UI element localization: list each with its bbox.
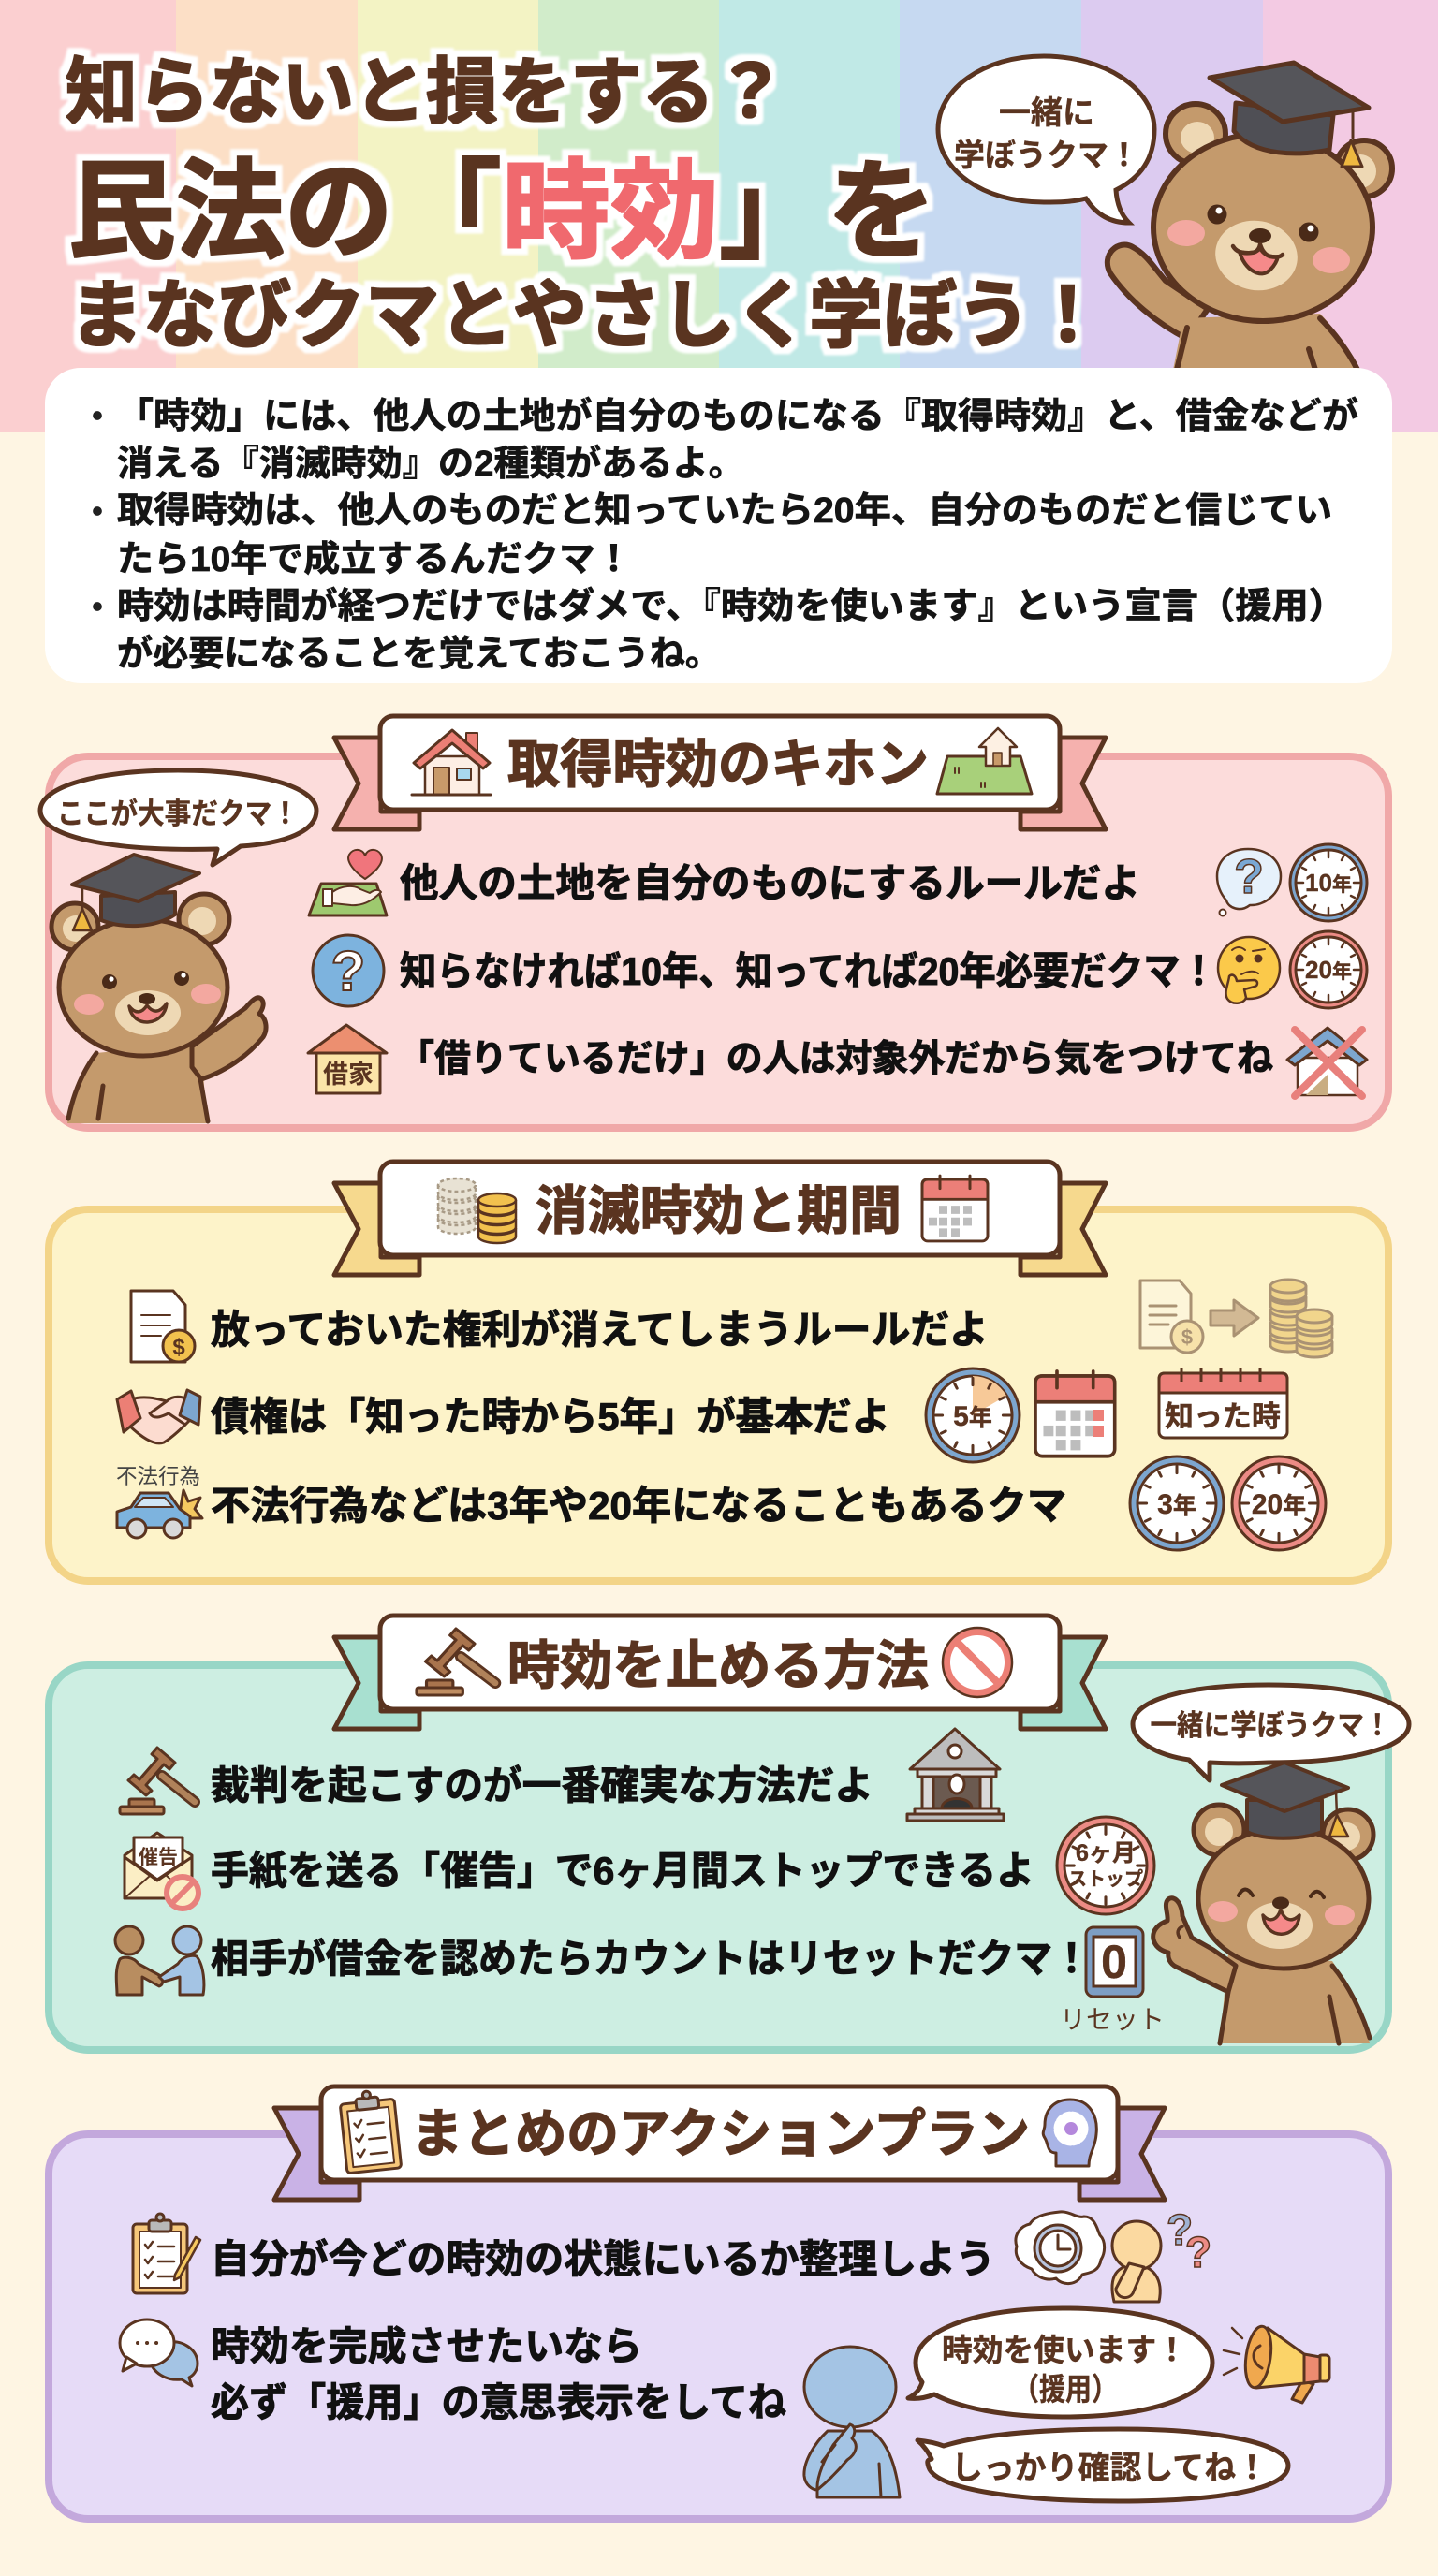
icon: clock six months: 6ヶ月 <box>1076 1840 1136 1866</box>
icon: gavel <box>120 1748 195 1814</box>
icon: question marks: ? <box>1185 2228 1211 2276</box>
row: land rule <box>309 844 1367 921</box>
icon: hand and heart <box>309 850 387 915</box>
icon: clock 5 years: 5年 <box>953 1401 992 1432</box>
icon: chat bubbles <box>120 2320 198 2386</box>
icon: megaphone <box>1224 2325 1329 2403</box>
title: まなびクマとやさしく学ぼう！ <box>69 273 1105 357</box>
panel: extinctive prescription <box>49 1162 1388 1581</box>
icon: land with house <box>937 728 1032 794</box>
icon: clock 10 years: 10年 <box>1305 869 1352 897</box>
icon: question marks: ? <box>1167 2205 1193 2254</box>
icon: thinking person <box>1112 2221 1161 2302</box>
icon: no sign <box>943 1628 1012 1697</box>
row: demand letter: 手紙を送る「催告」で6ヶ月間ストップできるよ <box>211 1849 1034 1893</box>
icon: clock thought cloud <box>1016 2212 1105 2284</box>
speech bubble: study together: 一緒に学ぼうクマ！ <box>1150 1709 1391 1742</box>
row: organize status <box>133 2205 1211 2302</box>
icon: envelope: 催告 <box>139 1847 178 1868</box>
speech bubble: study together <box>1133 1685 1409 1780</box>
ribbon heading <box>334 716 1106 829</box>
icon: clock six months: ストップ <box>1068 1868 1143 1890</box>
title: 知らないと損をする？ <box>66 52 786 133</box>
icon: person with speech <box>804 2347 900 2497</box>
icon: clipboard with pencil <box>133 2214 200 2293</box>
row: demand letter <box>125 1817 1154 1914</box>
icon: clipboard <box>339 2088 402 2174</box>
icon: clock 3 years: 3年 <box>1157 1489 1196 1520</box>
icon: zero counter: 0 <box>1101 1936 1127 1988</box>
icon: clock 10 years <box>1290 844 1367 921</box>
row: three or twenty years: 不法行為などは3年や20年になることもあるクマ <box>211 1484 1066 1528</box>
icon: rental house <box>308 1025 387 1093</box>
row: renters excluded: 「借りているだけ」の人は対象外だから気をつけてね <box>398 1039 1273 1079</box>
speech bubble: invoke <box>908 2308 1212 2417</box>
ribbon heading <box>274 2086 1165 2200</box>
icon: calendar with marks <box>1035 1371 1115 1456</box>
row: five years <box>117 1368 1287 1462</box>
icon: gavel <box>417 1629 495 1695</box>
icon: clock 3 years <box>1130 1456 1224 1550</box>
speech bubble: together: 一緒に <box>999 95 1094 131</box>
icon: courthouse <box>907 1729 1004 1821</box>
row: lawsuit: 裁判を起こすのが一番確実な方法だよ <box>211 1764 873 1808</box>
mascot: happy bear <box>1153 1763 1373 2043</box>
speech bubble: important: ここが大事だクマ！ <box>57 798 299 830</box>
ribbon heading: 取得時効のキホン <box>507 735 929 794</box>
icon: house <box>412 730 491 795</box>
speech bubble: invoke: 時効を使います！ <box>942 2333 1187 2367</box>
icon: zero counter <box>1086 1927 1143 1997</box>
row: lawsuit <box>120 1729 1004 1821</box>
icon: head with gear <box>1043 2100 1096 2166</box>
panel: acquisitive prescription <box>40 716 1388 1128</box>
panel: action plan <box>49 2086 1388 2519</box>
icon: clock 20 years: 20年 <box>1252 1489 1306 1520</box>
row: ten or twenty years: 知らなければ10年、知ってれば20年必要だクマ！ <box>400 949 1217 993</box>
row: organize status: 自分が今どの時効の状態にいるか整理しよう <box>211 2237 995 2281</box>
icon: car accident: 不法行為 <box>116 1465 200 1488</box>
icon: question marks <box>1167 2205 1211 2276</box>
icon: calendar label: 知った時 <box>1165 1400 1281 1433</box>
bullet list: が必要になることを覚えておこうね。 <box>117 635 721 674</box>
label: reset: リセット <box>1060 2005 1165 2034</box>
bullet list: 消える『消滅時効』の2種類があるよ。 <box>117 445 744 484</box>
icon: clock 20 years <box>1290 931 1367 1008</box>
icon: clock 5 years <box>926 1368 1020 1462</box>
row: ten or twenty years <box>313 931 1367 1008</box>
bullet list: 「時効」には、他人の土地が自分のものになる『取得時効』と、借金などが <box>117 397 1358 436</box>
icon: clock 20 years <box>1232 1456 1326 1550</box>
title <box>66 52 1105 357</box>
icon: two people shaking hands <box>115 1926 204 1995</box>
speech bubble: together: 学ぼうクマ！ <box>954 138 1139 172</box>
row: five years: 債権は「知った時から5年」が基本だよ <box>211 1395 890 1439</box>
icon: thinking face <box>1218 937 1280 1003</box>
row: acknowledgement resets: 相手が借金を認めたらカウントはリセットだクマ！ <box>211 1937 1091 1981</box>
icon: clock six months <box>1057 1817 1154 1914</box>
icon: question thought bubble: ? <box>1234 850 1264 904</box>
bullet list: 取得時効は、他人のものだと知っていたら20年、自分のものだと信じてい <box>117 491 1332 531</box>
row: rights disappear <box>131 1280 1332 1362</box>
icon: car accident <box>116 1465 202 1538</box>
row: invoke <box>120 2308 1329 2501</box>
title: 民法の「時効」を <box>67 151 936 272</box>
icon: calendar label <box>1159 1368 1287 1438</box>
row: renters excluded <box>308 1025 1367 1096</box>
speech bubble: confirm <box>917 2429 1288 2501</box>
icon: document to coins <box>1140 1280 1332 1357</box>
mascot: pointing bear <box>51 855 266 1123</box>
ribbon heading <box>334 1616 1106 1729</box>
ribbon heading: 消滅時効と期間 <box>536 1181 902 1240</box>
icon: document to coins: $ <box>1181 1325 1193 1349</box>
row: land rule: 他人の土地を自分のものにするルールだよ <box>400 861 1140 905</box>
row: invoke: 時効を完成させたいなら <box>211 2324 642 2368</box>
icon: crossed-out house <box>1287 1028 1367 1096</box>
bullet list <box>94 397 1358 674</box>
icon: rental house: 借家 <box>323 1061 374 1089</box>
icon: document with coin <box>131 1291 195 1362</box>
summary panel <box>45 368 1392 683</box>
speech bubble: invoke: （援用） <box>1013 2372 1118 2407</box>
panel: how to stop prescription <box>49 1616 1409 2050</box>
speech bubble: together <box>938 56 1154 223</box>
row: three or twenty years <box>116 1456 1326 1550</box>
row: acknowledgement resets <box>115 1926 1165 2034</box>
icon: calendar <box>922 1176 988 1241</box>
ribbon heading <box>334 1162 1106 1275</box>
speech bubble: confirm: しっかり確認してね！ <box>951 2451 1268 2486</box>
bullet list: 時効は時間が経つだけではダメで、『時効を使います』という宣言（援用） <box>117 587 1345 626</box>
icon: envelope <box>125 1833 198 1909</box>
icon: clock 20 years: 20年 <box>1305 956 1352 984</box>
row: invoke: 必ず「援用」の意思表示をしてね <box>211 2380 786 2424</box>
icon: question circle <box>313 935 384 1006</box>
bullet list: たら10年で成立するんだクマ！ <box>117 540 632 579</box>
mascot: waving bear <box>1108 63 1392 374</box>
icon: question circle: ? <box>331 940 365 1003</box>
icon: coins <box>438 1178 516 1243</box>
icon: document with coin: $ <box>172 1335 185 1360</box>
ribbon heading: 時効を止める方法 <box>507 1636 929 1695</box>
row: rights disappear: 放っておいた権利が消えてしまうルールだよ <box>211 1308 989 1352</box>
speech bubble: important <box>40 770 316 865</box>
icon: handshake <box>117 1390 200 1443</box>
icon: question thought bubble <box>1217 849 1281 915</box>
ribbon heading: まとめのアクションプラン <box>411 2104 1030 2163</box>
